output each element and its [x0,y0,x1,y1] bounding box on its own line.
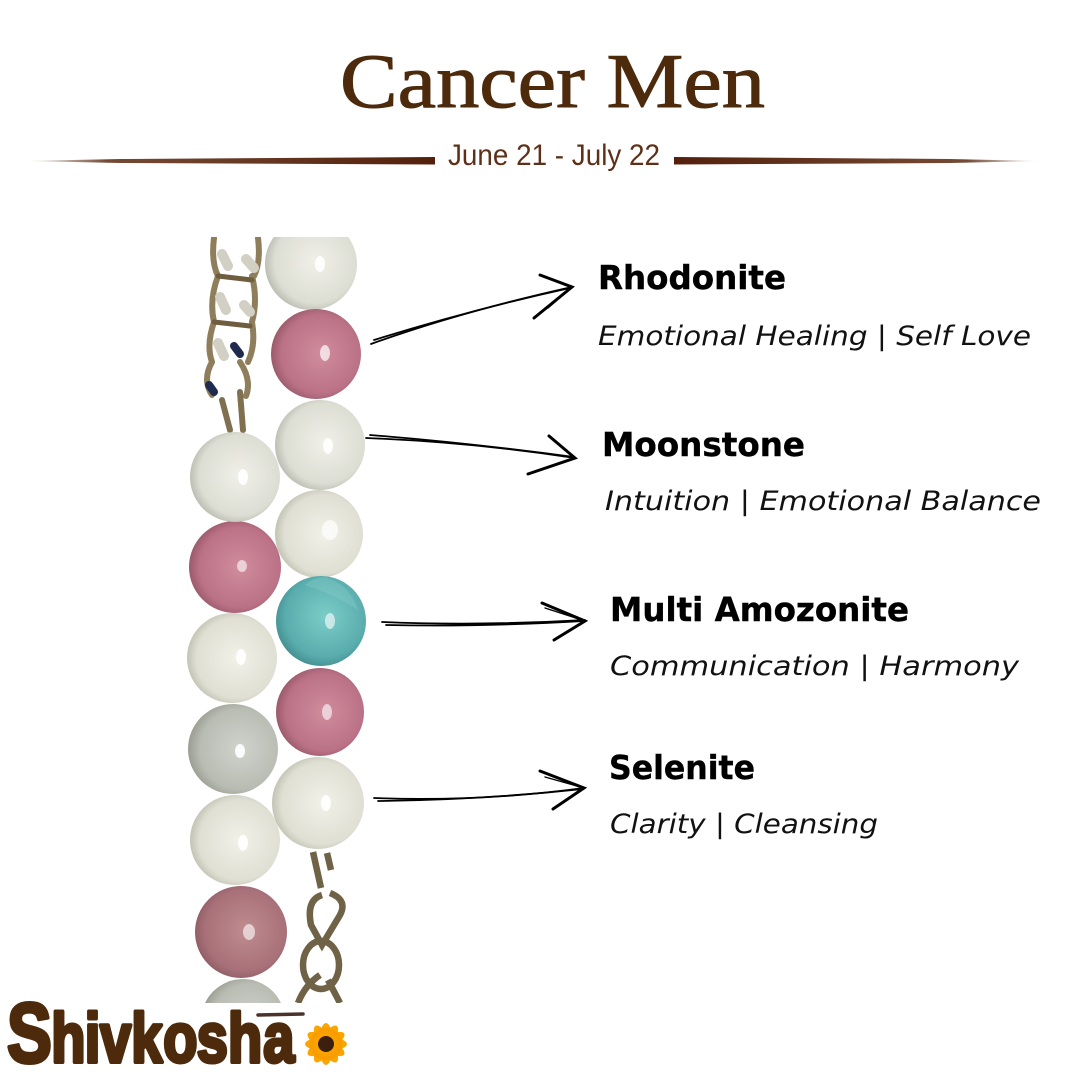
stone: rhodonite: Rhodonite [598,258,786,297]
stone: moonstone: Moonstone [602,425,805,464]
arrow: selenite [374,771,584,809]
logo: Shivkosha: S [7,987,52,1080]
date range: June 21 - July 22 [448,139,660,172]
stone: multi amozonite [610,590,1020,682]
arrow: rhodonite [371,275,572,344]
logo: Shivkosha: hivkosha [51,1000,295,1077]
stone: multi amozonite: Multi Amozonite [610,590,909,629]
date divider [25,139,1040,172]
arrow: moonstone [366,435,575,474]
top chain [207,238,259,430]
icon: sunflower [304,1022,348,1066]
bottom chain [298,852,342,1003]
stone: selenite [609,748,878,840]
bead highlights [235,256,338,940]
right strand beads [265,218,366,849]
stone: rhodonite: Emotional Healing | Self Love [598,321,1031,352]
stone: moonstone [602,425,1041,517]
stone: selenite: Clarity | Cleansing [610,809,878,840]
stone: multi amozonite: Communication | Harmony [610,651,1020,682]
title: Cancer Men [340,38,765,124]
bracelet photo [187,218,366,1063]
left strand beads [187,432,287,1063]
stone: moonstone: Intuition | Emotional Balance [605,486,1041,517]
logo: Shivkosha [7,987,348,1080]
stone: selenite: Selenite [609,748,755,787]
stone: rhodonite [598,258,1031,352]
arrow: multi amozonite [382,603,585,640]
